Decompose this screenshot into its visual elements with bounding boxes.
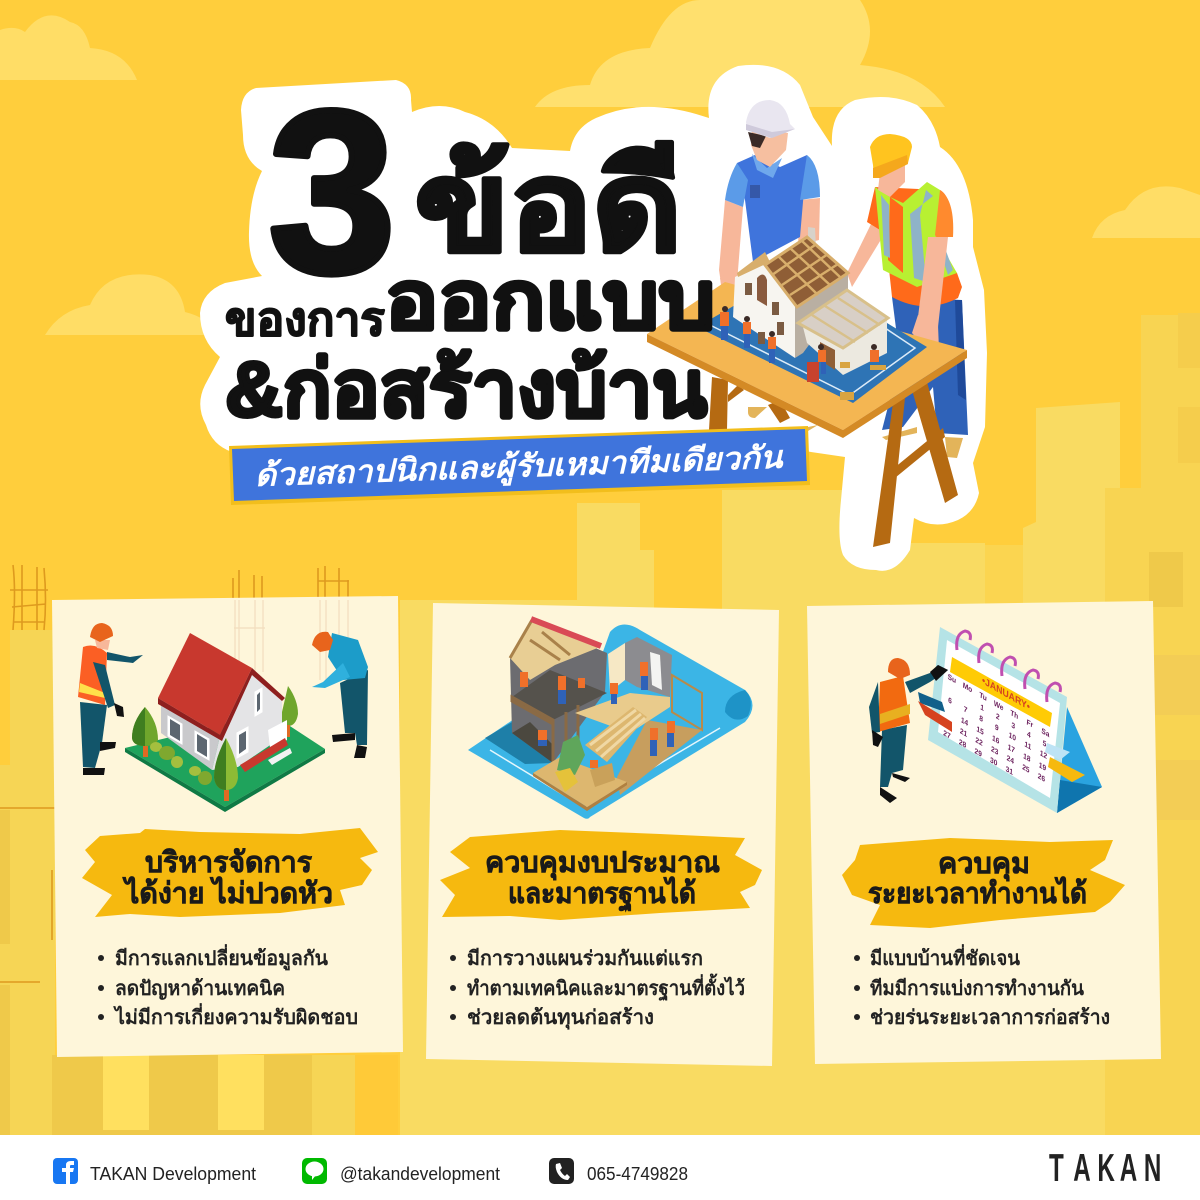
footer (0, 1135, 1200, 1200)
panel: budget control (426, 603, 779, 1066)
brush heading (82, 828, 378, 917)
title line 2: ของการ (225, 293, 385, 345)
calendar month: •JANUARY• (982, 675, 1030, 714)
bullet list: ช่วยร่นระยะเวลาการก่อสร้าง (870, 1006, 1110, 1029)
calendar dates: 2 (996, 711, 1000, 722)
calendar dates: 9 (995, 722, 999, 733)
calendar dates: We (993, 698, 1004, 713)
calendar dates: 22 (975, 735, 983, 748)
brush heading: ระยะเวลาทำงานได้ (868, 876, 1087, 910)
calendar rings (957, 631, 1060, 702)
bullet list: ทีมมีการแบ่งการทำงานกัน (870, 977, 1084, 1000)
banner text: ด้วยสถาปนิกและผู้รับเหมาทีมเดียวกัน (254, 440, 785, 495)
calendar dates (942, 672, 1051, 796)
tiny workers (720, 312, 879, 362)
brush heading (842, 838, 1125, 928)
calendar dates: 24 (1006, 753, 1015, 766)
title line 3: &ก่อสร้างบ้าน (225, 345, 707, 433)
calendar dates: 10 (1008, 730, 1016, 743)
logo: TAKAN (1049, 1146, 1161, 1189)
calendar dates: 1 (980, 702, 984, 713)
bullet list: มีแบบบ้านที่ชัดเจน (870, 943, 1020, 970)
bullet list: มีการวางแผนร่วมกันแต่แรก (467, 947, 703, 970)
calendar dates: 7 (963, 704, 968, 715)
contractor (847, 134, 968, 458)
calendar dates: 18 (1023, 751, 1031, 764)
calendar dates: 8 (979, 713, 983, 724)
calendar dates: Fr (1026, 717, 1034, 730)
calendar dates: 29 (974, 746, 982, 759)
architect (719, 100, 820, 431)
title numeral: 3 (268, 63, 396, 322)
blueprint (697, 285, 927, 403)
brush heading: ได้ง่าย ไม่ปวดหัว (122, 876, 333, 910)
calendar dates: Su (947, 672, 957, 686)
illustration: workers inspecting house (78, 623, 368, 812)
calendar dates: 16 (992, 733, 1000, 746)
title word: benefits: ข้อดี (415, 138, 682, 277)
calendar dates: 21 (960, 726, 968, 739)
calendar dates: 26 (1037, 771, 1045, 784)
phone label: 065-4749828 (587, 1164, 688, 1184)
calendar dates: 4 (1027, 729, 1032, 740)
calendar dates: 12 (1040, 748, 1048, 761)
calendar dates: 30 (990, 755, 998, 768)
line label: @takandevelopment (340, 1164, 500, 1184)
brush heading: และมาตรฐานได้ (508, 876, 696, 912)
illustration: cutaway house on blueprint (468, 619, 752, 819)
calendar dates: 3 (1011, 720, 1016, 731)
icon: phone (549, 1158, 574, 1184)
calendar dates: 31 (1005, 764, 1013, 777)
calendar dates: 17 (1007, 742, 1015, 755)
bullet list (854, 943, 1110, 1029)
banner (229, 426, 810, 505)
bullet list (450, 947, 745, 1030)
calendar dates: Sa (1041, 726, 1051, 740)
calendar dates: 6 (948, 695, 952, 706)
bullet list: ช่วยลดต้นทุนก่อสร้าง (467, 1006, 654, 1030)
bullet list: ไม่มีการเกี่ยงความรับผิดชอบ (113, 1002, 358, 1029)
icon: facebook (53, 1158, 78, 1184)
worker right (340, 670, 368, 745)
worker (880, 725, 907, 787)
white sticker outline (200, 65, 987, 571)
calendar dates: 5 (1042, 738, 1047, 749)
bullet list: มีการแลกเปลี่ยนข้อมูลกัน (115, 943, 328, 972)
calendar dates: 23 (991, 744, 999, 757)
calendar dates: Tu (979, 690, 988, 703)
worker left (80, 702, 107, 768)
title (225, 63, 715, 433)
heading text: ควบคุมงบประมาณ (485, 847, 720, 880)
calendar dates: 11 (1024, 739, 1032, 752)
calendar dates: 28 (959, 737, 967, 750)
calendar dates: 25 (1022, 762, 1030, 775)
table legs back (709, 377, 790, 430)
calendar ribbons (918, 692, 945, 712)
facebook label: TAKAN Development (90, 1164, 256, 1184)
heading text: บริหารจัดการ (145, 847, 312, 879)
calendar dates: 15 (976, 724, 984, 737)
panel: schedule control (807, 601, 1161, 1064)
illustration: architect and contractor with model house (647, 100, 968, 547)
heading text: ควบคุม (938, 848, 1030, 881)
panel: easy management (52, 596, 403, 1057)
calendar dates: 19 (1038, 760, 1046, 773)
calendar dates: 14 (961, 715, 969, 728)
brush heading (440, 830, 762, 920)
calendar dates: Mo (962, 680, 973, 695)
model house (720, 227, 888, 400)
icon: line (302, 1158, 327, 1184)
bullet list (98, 943, 358, 1029)
tabletop (647, 282, 967, 430)
table legs front (873, 382, 958, 547)
bullet list: ทำตามเทคนิคและมาตรฐานที่ตั้งไว้ (467, 973, 745, 1002)
calendar dates: 27 (943, 728, 951, 741)
illustration: worker with calendar (869, 627, 1102, 813)
bullet list: ลดปัญหาด้านเทคนิค (115, 977, 285, 1000)
title line 2 large: ออกแบบ (385, 256, 715, 345)
calendar dates: Th (1010, 708, 1019, 721)
